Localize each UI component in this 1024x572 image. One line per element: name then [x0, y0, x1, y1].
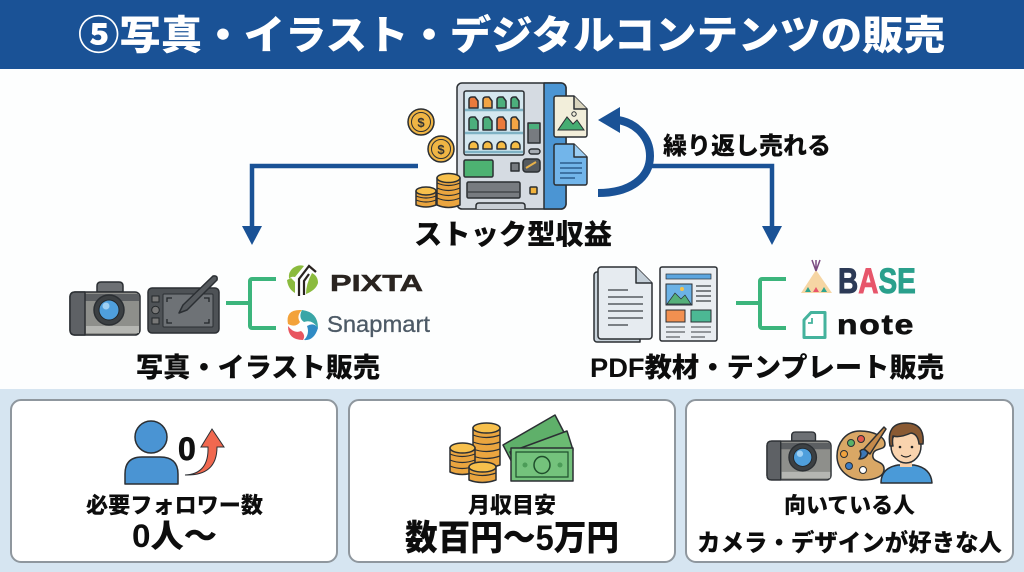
icon: paint palette — [837, 427, 886, 480]
icon: document file — [554, 144, 587, 185]
icon: vending machine — [457, 83, 566, 209]
logo: PIXTA — [287, 265, 423, 296]
logo: BASE — [801, 260, 916, 301]
icon: smiling person — [881, 423, 932, 483]
icon: image file — [554, 96, 587, 137]
arrow: right branch to PDF and template sales — [650, 166, 782, 245]
value: income range: 数百円〜5万円 — [405, 519, 619, 558]
bottom band — [0, 389, 1024, 572]
icon: coins and stacks — [408, 109, 460, 208]
value: zero followers: 0人〜 — [132, 518, 217, 554]
arrow: left branch to photo and illustration sales — [242, 166, 418, 245]
heading: PDF and template sales: PDF教材・テンプレート販売 — [590, 353, 944, 383]
panel: required followers — [11, 400, 337, 562]
icon: template layout — [660, 267, 717, 341]
label: suitable people: 向いている人 — [784, 493, 915, 518]
value: camera and design lovers: カメラ・デザインが好きな人 — [697, 529, 1002, 557]
logo: BASE: BASE — [838, 261, 916, 301]
label: repeat sales: 繰り返し売れる — [663, 133, 831, 160]
icon: stacked documents — [594, 267, 652, 342]
label: monthly income: 月収目安 — [468, 493, 556, 518]
label: required followers: 必要フォロワー数 — [86, 493, 263, 518]
logo: Snapmart: Snapmart — [327, 311, 431, 337]
connector: right platforms — [736, 279, 786, 328]
icon: drawing tablet and pen — [148, 276, 219, 333]
logo: Snapmart — [288, 310, 431, 340]
heading: stock income: ストック型収益 — [414, 219, 612, 250]
icon: person with follower growth — [125, 421, 224, 484]
arrow: repeat sales loop — [598, 107, 650, 193]
logo: note: note — [837, 309, 915, 340]
heading: photo and illustration sales: 写真・イラスト販売 — [136, 353, 380, 383]
icon: coin stacks — [450, 423, 500, 482]
icon: person with follower growth: 0 — [178, 431, 196, 467]
icon: camera — [70, 282, 140, 335]
icon: coins and stacks: $ — [437, 142, 445, 157]
title banner: ⑤写真・イラスト・デジタルコンテンツの販売 — [78, 13, 945, 58]
panel: monthly income — [349, 400, 675, 562]
logo: PIXTA: PIXTA — [330, 270, 423, 296]
icon: banknotes — [503, 415, 573, 481]
icon: coins and stacks: $ — [417, 115, 425, 130]
panel: suitable people — [686, 400, 1013, 562]
icon: camera — [767, 432, 831, 480]
connector: left platforms — [226, 279, 276, 328]
title banner — [0, 0, 1024, 69]
